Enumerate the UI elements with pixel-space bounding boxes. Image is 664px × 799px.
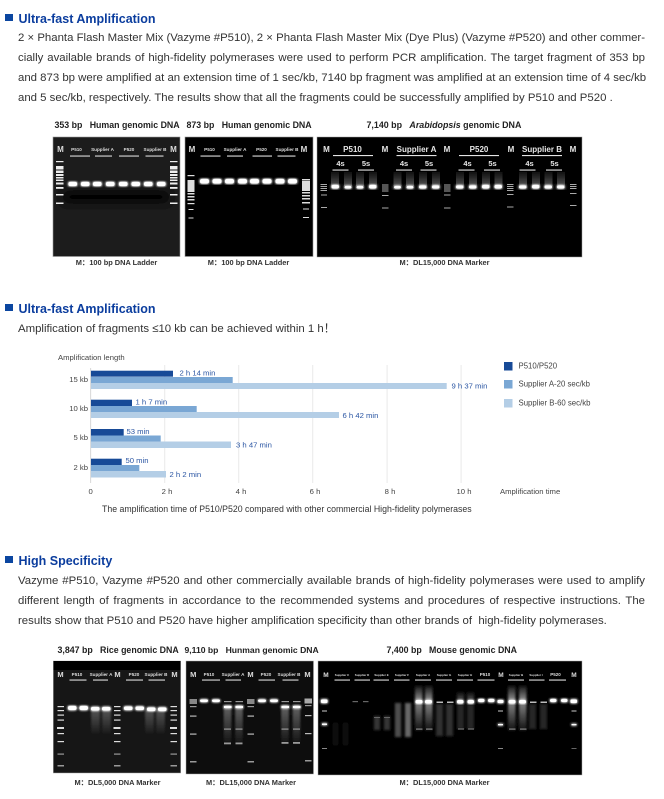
gel image: Supplier B	[145, 672, 168, 677]
text block: within 1 h: Amplification of fragments ≤10 kb can be achieved within 1 h！	[18, 323, 335, 335]
grid lines and y-axis title: Amplification length	[58, 353, 125, 362]
gel image	[53, 661, 181, 773]
gel caption: M：100 bp DNA Ladder	[208, 258, 289, 267]
text block: intro paragraph: cially available brands of high-fidelity polymerases were used to perform PCR amplification. The target fragment of 353 bp	[18, 52, 645, 64]
gel image	[318, 661, 582, 775]
x-axis labels: 2 h	[162, 487, 172, 496]
gel image: M	[114, 670, 121, 679]
gel panel: 873 bp	[185, 120, 313, 267]
gel panel: 9110 bp	[184, 645, 319, 787]
gel image: Supplier B	[144, 147, 167, 152]
text block: intro paragraph	[18, 32, 646, 104]
gel image: P520	[124, 147, 135, 152]
gel image: Supplier A	[91, 147, 115, 152]
gel image: Supplier B	[278, 672, 301, 677]
gel image: P510	[480, 672, 491, 677]
gel image: M	[170, 145, 177, 154]
text block: intro paragraph: and 5 sec/kb, respectively. The results show that all the fragments could be successfully amplified by P510 and P520 .	[18, 92, 613, 104]
gel title: 3,847 bp Rice genomic DNA	[58, 645, 179, 655]
heading: ultra-fast amplification 2: Ultra-fast Amplification	[18, 302, 156, 316]
gel image: M	[301, 145, 308, 154]
gel title: 873 bp Human genomic DNA	[186, 120, 312, 130]
x-axis labels: 8 h	[385, 487, 395, 496]
gel image: Supplier B	[522, 145, 562, 154]
gel image: Supplier A	[397, 145, 437, 154]
gel image: M	[323, 672, 329, 679]
gel image: P520	[261, 672, 272, 677]
bars: 15 kb	[69, 368, 487, 390]
gel image: 4s	[525, 159, 534, 168]
gel image: M	[571, 672, 577, 679]
bars: 2 kb: 2 kb	[73, 463, 88, 472]
bars: 5 kb: 53 min	[126, 427, 150, 436]
gel image: Supplier H	[458, 673, 472, 677]
gel caption: M：100 bp DNA Ladder	[76, 258, 157, 267]
gel image: Supplier A	[90, 672, 113, 677]
gel image: P510	[343, 145, 362, 154]
gel image: Supplier F	[395, 673, 409, 677]
gel image: 5s	[362, 159, 370, 168]
gel image: 5s	[425, 159, 433, 168]
gel panel: 7140 bp	[317, 120, 582, 267]
legend: Supplier A-20 sec/kb	[518, 380, 591, 388]
gel title: 7,400 bp Mouse genomic DNA	[386, 645, 518, 655]
gel image: M	[304, 670, 311, 679]
gel caption: M：DL5,000 DNA Marker	[75, 778, 161, 787]
gel image: P520	[129, 672, 140, 677]
bars: 5 kb: 5 kb	[73, 433, 88, 442]
heading: ultra-fast amplification 1: Ultra-fast Amplification	[18, 12, 156, 26]
gel image: P510	[204, 672, 215, 677]
bars: 5 kb: 3 h 47 min	[236, 440, 272, 450]
text block: specificity paragraph: results show that P510 and P520 have higher amplification specificity than other brands of high-fidelity polymerases.	[18, 615, 607, 627]
gel image: M	[57, 145, 64, 154]
x-axis labels: 4 h	[236, 487, 246, 496]
x-axis labels: 0	[89, 487, 93, 496]
gel image: Supplier A	[222, 672, 245, 677]
legend: P510/P520	[518, 362, 558, 370]
gel image: Supplier E	[374, 673, 389, 677]
gel panel: 7400 bp	[318, 645, 582, 787]
gel image: Supplier B	[276, 147, 299, 152]
bars: 5 kb	[73, 427, 272, 450]
bars: 10 kb	[69, 398, 378, 420]
x-axis labels	[89, 487, 560, 496]
gel image: Supplier D	[355, 673, 369, 677]
bars: 15 kb: 15 kb	[69, 375, 88, 384]
gel image: M	[171, 670, 178, 679]
gel image: M	[444, 145, 451, 154]
gel image: P510	[72, 672, 83, 677]
text block: specificity paragraph	[18, 575, 645, 627]
x-axis labels: Amplification time	[500, 487, 560, 496]
legend: Supplier B-60 sec/kb	[518, 398, 591, 408]
gel image: M	[57, 670, 64, 679]
gel caption: M：DL15,000 DNA Marker	[399, 778, 490, 787]
bars: 2 kb: 2 h 2 min	[170, 470, 201, 479]
gel title: 9,110 bp Hunman genomic DNA	[184, 645, 319, 655]
gel image: M	[247, 670, 254, 679]
text block: intro paragraph: 2 × Phanta Flash Master Mix (Vazyme #P510), 2 × Phanta Flash Master Mix (Dye Plus) (Vazyme #P520) and other commer-	[18, 32, 645, 44]
gel image: 4s	[400, 159, 408, 168]
gel image: 4s	[463, 159, 472, 168]
gel image: M	[382, 145, 389, 154]
legend	[504, 362, 591, 408]
text block: specificity paragraph: different length of fragments in accordance to the recommended systems and procedures of respective instructions. The	[18, 595, 645, 607]
gel image: 5s	[488, 159, 497, 168]
gel title: 353 bp Human genomic DNA	[54, 120, 180, 130]
bars: 15 kb: 2 h 14 min	[180, 368, 215, 378]
gel image: Supplier A	[416, 673, 431, 677]
bars: 15 kb: 9 h 37 min	[452, 382, 487, 390]
gel image: P520	[256, 147, 267, 152]
gel image: M	[508, 145, 515, 154]
gel image: Supplier C	[335, 673, 350, 677]
gel image: M	[570, 145, 577, 154]
gel image: M	[498, 672, 504, 679]
gel image	[53, 137, 180, 256]
bars: 2 kb	[73, 456, 201, 479]
bar chart: amplification time	[58, 353, 591, 514]
chart caption: The amplification time of P510/P520 compared with other commercial High-fidelity polymerases	[102, 504, 472, 514]
gel caption: M：DL15,000 DNA Marker	[206, 778, 296, 787]
text block: intro paragraph: and 873 bp were amplified at an extension time of 1 sec/kb, 7140 bp fragment was amplified at an extension time of 4 sec/kb	[18, 72, 646, 84]
gel image: P510	[204, 147, 215, 152]
text block: specificity paragraph: Vazyme #P510, Vazyme #P520 and other commercially available brands of high-fidelity polymerases were used to amplify	[18, 575, 645, 587]
x-axis labels: 10 h	[457, 487, 471, 496]
gel image: P520	[470, 145, 489, 154]
gel image: M	[189, 145, 196, 154]
x-axis labels: 6 h	[310, 487, 320, 496]
gel image: P520	[550, 672, 561, 677]
bars: 10 kb: 1 h 7 min	[136, 398, 167, 406]
gel image: M	[323, 145, 330, 154]
gel image: 4s	[336, 159, 345, 168]
gel image	[185, 137, 313, 256]
gel caption: M：DL15,000 DNA Marker	[399, 258, 490, 267]
gel image: Supplier G	[437, 673, 452, 677]
bars: 10 kb: 6 h 42 min	[342, 411, 378, 420]
gel image: 5s	[550, 159, 559, 168]
heading: high specificity: High Specificity	[18, 554, 112, 568]
gel image: P510	[71, 147, 82, 152]
gel panel: 3847 bp	[53, 645, 181, 787]
gel image: Supplier I	[529, 673, 543, 677]
gel title: 7,140 bp Arabidopsis genomic DNA	[366, 120, 522, 130]
gel image: Supplier B	[509, 673, 523, 677]
bars: 2 kb: 50 min	[126, 456, 149, 465]
gel image	[186, 661, 314, 774]
gel image: Supplier A	[224, 147, 247, 152]
gel image	[317, 137, 582, 257]
bars: 10 kb: 10 kb	[69, 404, 88, 413]
gel panel: 353 bp	[53, 120, 180, 267]
gel image: M	[190, 670, 196, 679]
